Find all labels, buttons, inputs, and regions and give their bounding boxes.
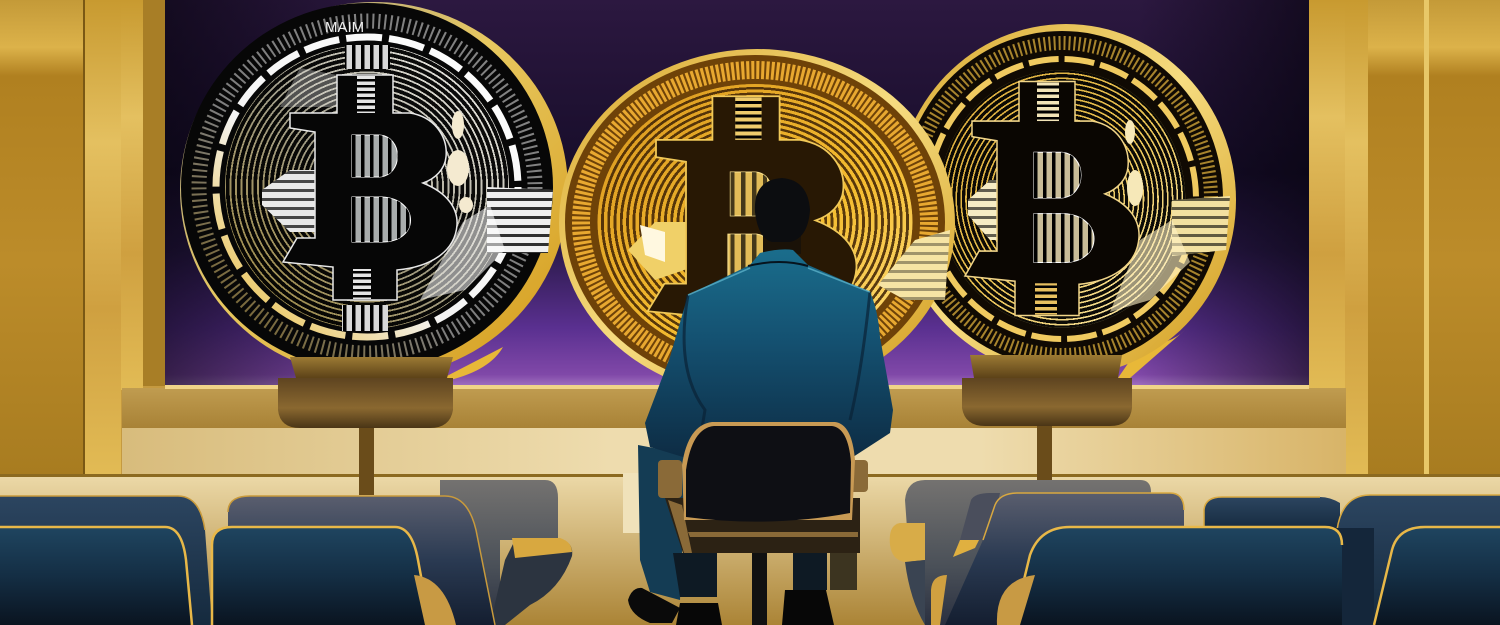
outer inscription band	[913, 43, 1211, 355]
engraved rings	[598, 84, 912, 360]
man seated from behind	[628, 178, 893, 625]
chair	[658, 422, 868, 625]
lower wall	[122, 428, 1346, 475]
coin: left silver	[180, 2, 568, 378]
right coin stand	[962, 355, 1132, 492]
seats left	[0, 480, 572, 625]
suit jacket	[645, 249, 893, 457]
coin: right gold	[896, 24, 1236, 378]
icon: bitcoin symbol left	[283, 45, 457, 331]
icon: bitcoin symbol center	[648, 96, 856, 355]
icon: bitcoin symbol right	[965, 82, 1139, 316]
left coin stand	[278, 347, 503, 495]
legs and shoes	[628, 445, 857, 625]
floor	[0, 473, 1500, 625]
right gold pillars	[1309, 0, 1500, 475]
engraved rings	[225, 45, 509, 329]
seats right	[890, 480, 1500, 625]
coin: center gold	[559, 49, 955, 397]
engraved rings	[939, 70, 1185, 328]
purple screen	[165, 0, 1309, 386]
outer inscription band	[199, 21, 535, 353]
icon: head	[755, 178, 810, 254]
left gold pillars	[0, 0, 165, 475]
gold ledge	[122, 385, 1346, 428]
coin inscription: MAIM	[325, 19, 364, 36]
